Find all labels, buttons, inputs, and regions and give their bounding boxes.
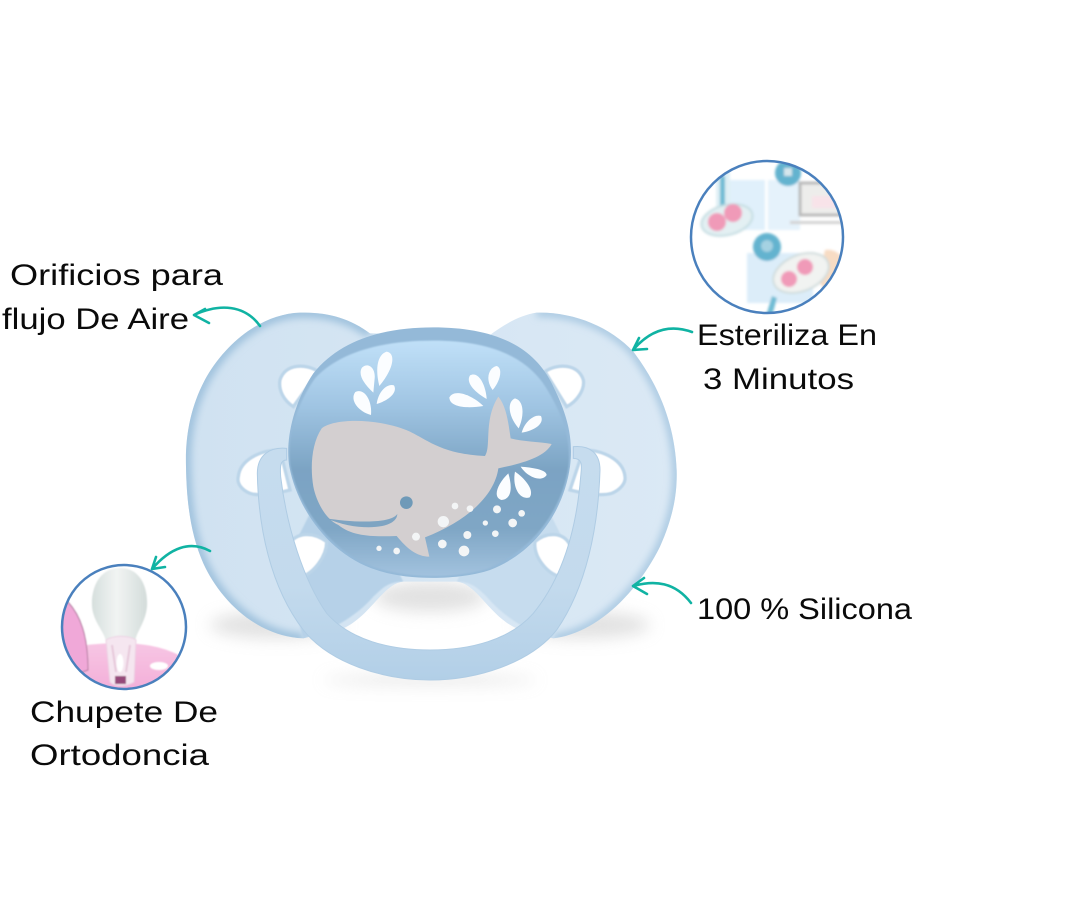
bubbles [376, 503, 525, 556]
label: air holes: Orificios para [10, 259, 223, 292]
label: sterilize [697, 319, 877, 396]
label: air holes: flujo De Aire [2, 303, 189, 336]
arrow: to flange top right [633, 329, 692, 350]
whale [312, 397, 552, 557]
label: sterilize: Esteriliza En [697, 319, 877, 352]
photo circle: sterilization steps [691, 160, 846, 316]
handle ring [257, 446, 600, 680]
whale mouth [327, 514, 397, 527]
label: orthodontic: Ortodoncia [30, 739, 209, 772]
label: sterilize: 3 Minutos [703, 363, 854, 396]
shield [288, 327, 571, 578]
label: silicone: 100 % Silicona [697, 593, 912, 626]
label: orthodontic [30, 696, 218, 772]
arrow: to flange bottom right [633, 578, 691, 603]
arrow: to air holes label [194, 308, 260, 326]
silicone flange [186, 313, 677, 638]
pacifier illustration [186, 313, 677, 684]
air holes [238, 366, 625, 577]
photo circle: orthodontic nipple [60, 565, 190, 700]
label: orthodontic: Chupete De [30, 696, 218, 729]
soft shadow [210, 582, 650, 684]
arrow: to nipple photo [152, 546, 210, 569]
whale eye [400, 496, 413, 509]
water drops [353, 352, 547, 500]
label: air holes [2, 259, 223, 336]
inner arm shading [300, 516, 403, 638]
